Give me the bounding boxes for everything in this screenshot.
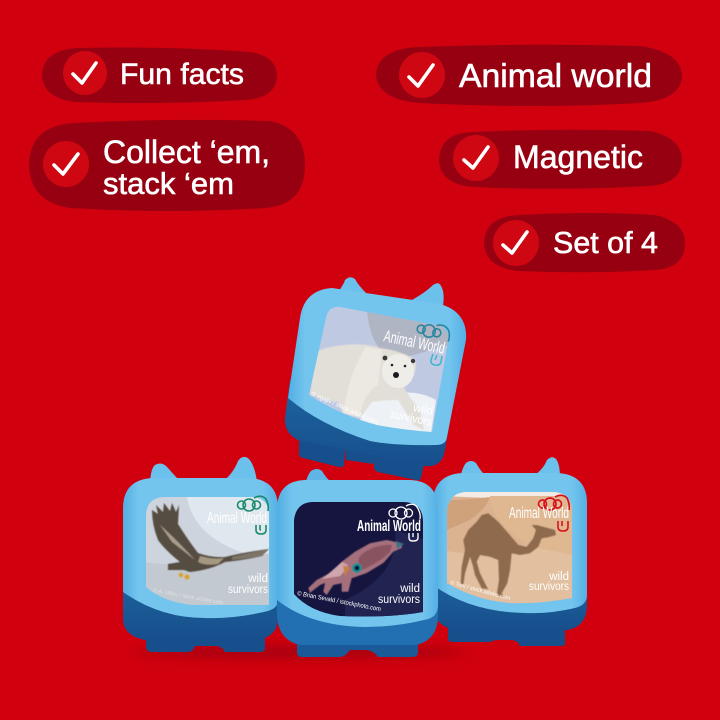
tagline: wild	[247, 573, 268, 585]
feet	[146, 630, 265, 652]
label photo	[294, 502, 423, 616]
base	[123, 570, 278, 640]
ears	[150, 457, 257, 482]
label photo	[146, 497, 269, 605]
body	[277, 480, 438, 627]
badge: Collect 'em, stack 'em	[29, 120, 305, 211]
ears	[338, 277, 444, 306]
body	[123, 478, 278, 618]
base	[285, 380, 450, 466]
body	[433, 473, 587, 613]
ears	[460, 457, 560, 478]
badge: Fun facts	[42, 48, 277, 103]
toy figure: camel: survivors	[529, 581, 569, 593]
badge: Set of 4: Set of 4	[553, 226, 658, 260]
badge: Magnetic: Magnetic	[513, 139, 643, 175]
toy figure: squid: © Brian Sevald / istockphoto.com	[297, 589, 382, 613]
badge: Animal world: Animal world	[459, 57, 652, 94]
feet	[297, 635, 418, 657]
tagline: wild	[411, 402, 434, 418]
toy figure: polar bear	[285, 277, 466, 480]
toy figure: polar bear: survivors	[389, 408, 433, 429]
body	[288, 288, 466, 445]
bear photo	[310, 344, 424, 430]
tagline: wild	[399, 583, 420, 595]
badge: Collect 'em, stack 'em: stack ‘em	[103, 166, 234, 201]
badge: Set of 4	[484, 213, 685, 272]
badge: Fun facts: Fun facts	[120, 58, 244, 91]
toy figure: squid: Animal World	[357, 518, 421, 535]
toy figure: camel	[433, 457, 587, 646]
toy figure: camel: © Toni / stock.adobe.com	[449, 579, 511, 602]
toy figure: polar bear: Animal World	[382, 327, 447, 358]
logo	[538, 495, 569, 510]
toy figure: eagle	[123, 457, 278, 652]
label photo	[309, 306, 448, 432]
base	[277, 570, 438, 645]
badge: Collect 'em, stack 'em: Collect ‘em,	[103, 134, 270, 170]
label photo	[447, 492, 572, 604]
ear	[305, 469, 333, 484]
camel photo	[461, 513, 556, 597]
feet	[299, 438, 425, 480]
toy figure: squid	[277, 469, 438, 657]
feet	[448, 622, 565, 646]
badge: Animal world	[376, 45, 682, 106]
logo	[238, 496, 268, 511]
badge: Magnetic	[439, 130, 682, 189]
toy figure: eagle: © A. Milev / stock.adobe.com	[153, 587, 224, 606]
toy figure: camel: Animal World	[509, 505, 569, 522]
toy figure: eagle: survivors	[228, 584, 268, 596]
squid photo	[308, 540, 404, 595]
base	[433, 570, 587, 630]
toy figure: eagle: Animal World	[207, 510, 267, 527]
logo	[389, 504, 420, 519]
tagline: wild	[548, 571, 569, 583]
ground shadow	[135, 645, 465, 659]
eagle photo	[152, 503, 269, 580]
toy figure: squid: survivors	[378, 594, 420, 606]
logo	[416, 320, 452, 342]
toy figure: polar bear: © vgajiv / stock.adobe.com	[310, 390, 379, 426]
